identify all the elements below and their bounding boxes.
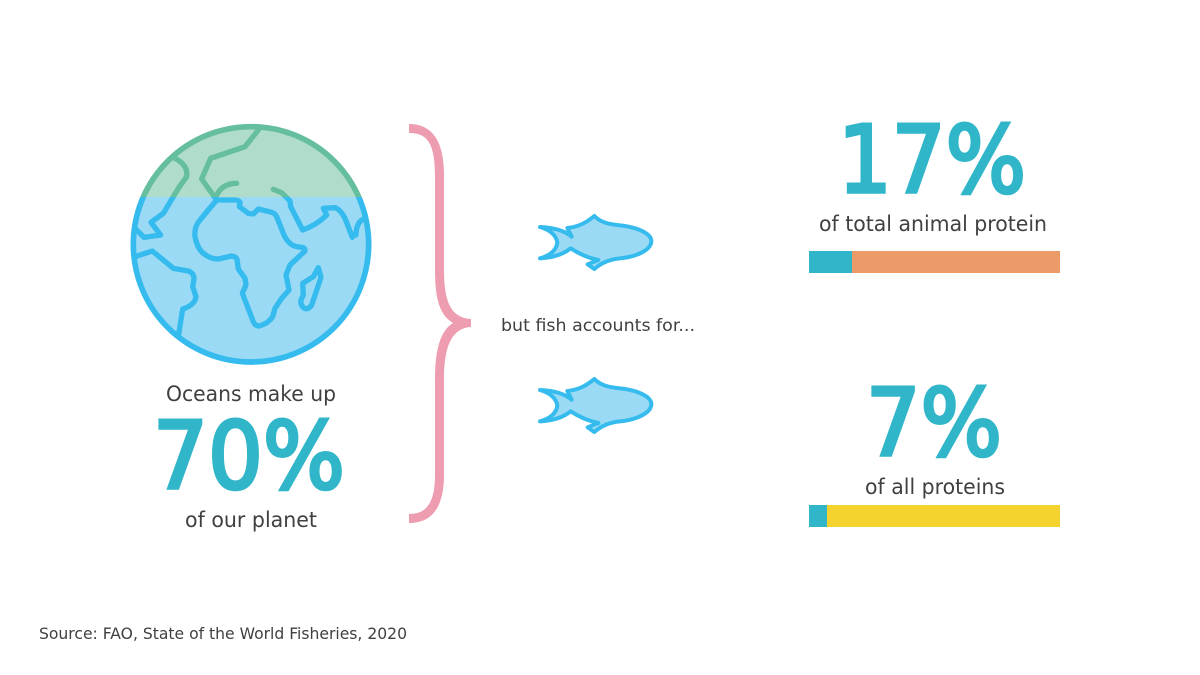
curly brace — [409, 124, 471, 523]
bar: 17 percent of animal protein — [809, 251, 1060, 273]
bar: 7 percent of all proteins — [809, 505, 1060, 527]
text: of all proteins: of all proteins — [865, 475, 1005, 499]
text: of total animal protein: of total animal protein — [819, 212, 1047, 236]
statistic: 70%: 70% — [153, 402, 345, 510]
globe icon — [133, 127, 369, 362]
text: but fish accounts for: but fish accounts for... — [501, 316, 695, 336]
source note: Source: FAO, State of the World Fisheries, 2020 — [39, 624, 407, 643]
statistic: 17%: 17% — [838, 106, 1026, 214]
icon: fish top — [540, 216, 651, 269]
text: oceans make up: Oceans make up — [166, 382, 336, 406]
text: of our planet: of our planet — [185, 508, 317, 532]
icon: fish bottom — [540, 379, 651, 432]
statistic: 7%: 7% — [866, 369, 1002, 477]
